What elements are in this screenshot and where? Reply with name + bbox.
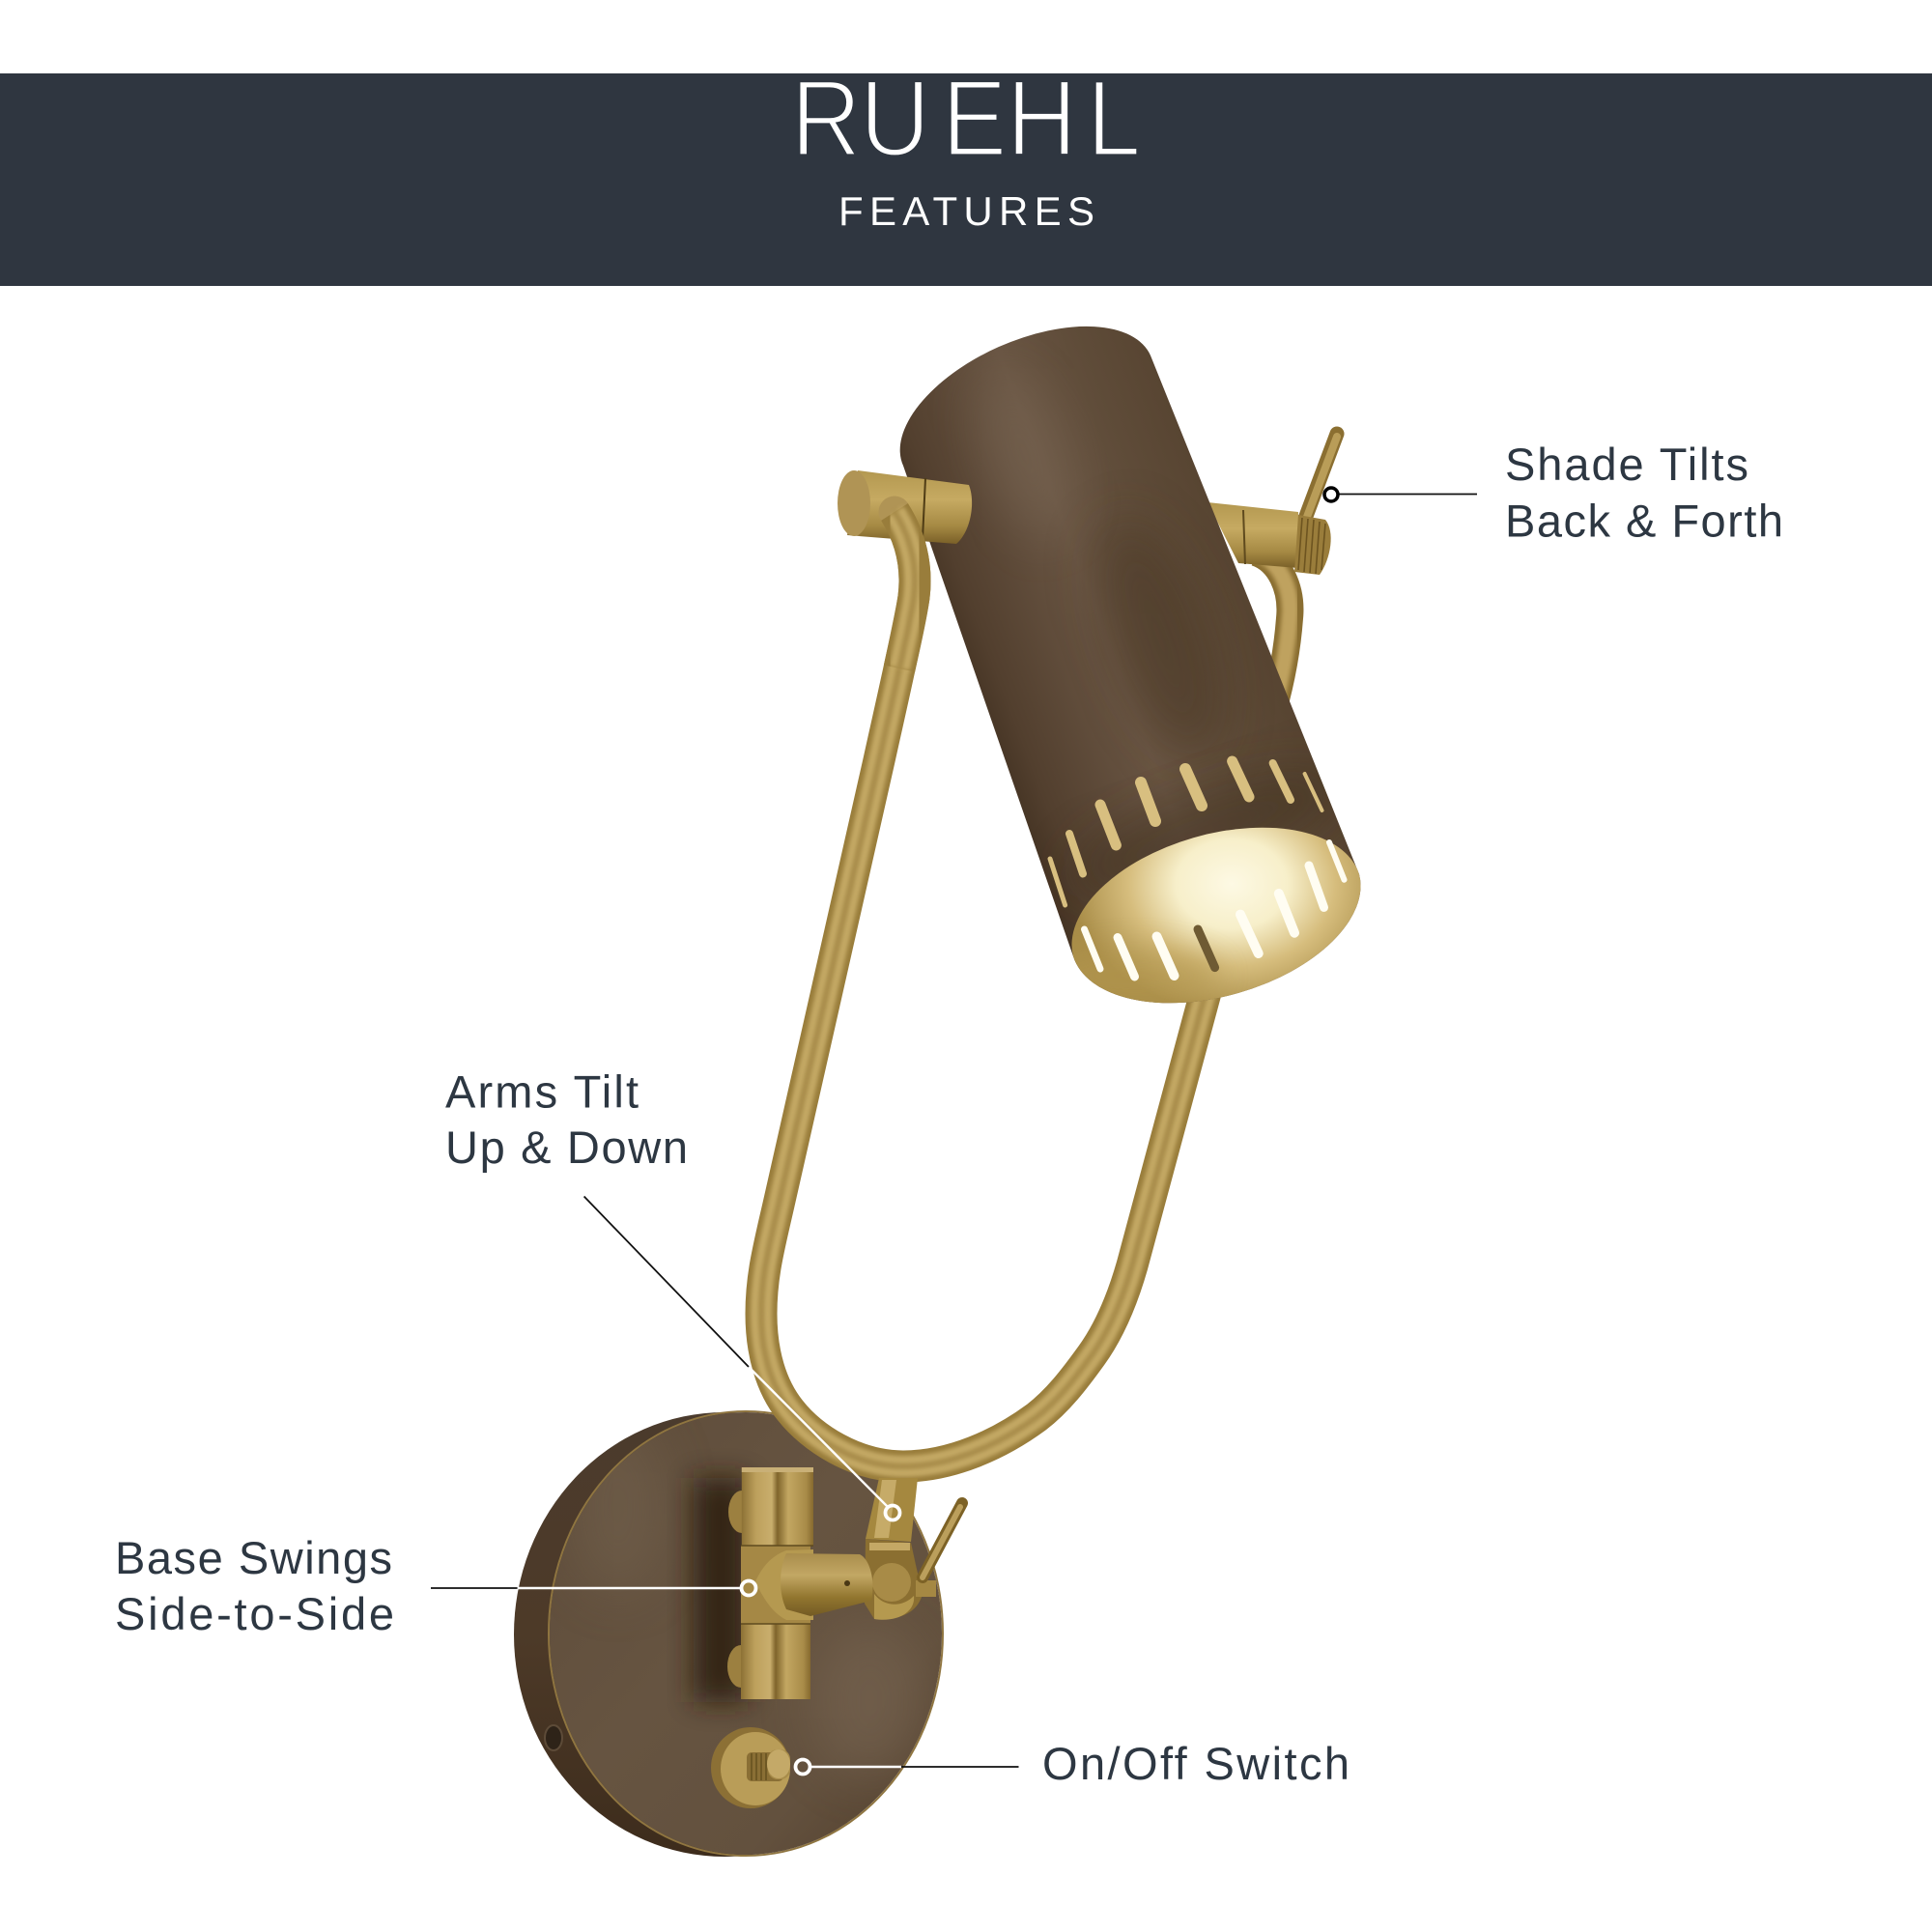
shade: [900, 327, 1361, 1005]
callout: arms tilt: [445, 1066, 900, 1520]
callout: shade tilts: Back & Forth: [1505, 495, 1783, 547]
callout: arms tilt: Arms Tilt: [445, 1066, 639, 1117]
wall plate: [514, 1411, 943, 1857]
callout: shade tilts: [1324, 439, 1783, 547]
right pivot and lever: [1208, 434, 1337, 710]
callout: on/off switch: On/Off Switch: [1042, 1738, 1350, 1789]
swivel base: [727, 1467, 813, 1699]
swing joint: [755, 1478, 962, 1620]
shade mouth: [1071, 828, 1361, 1003]
callout: shade tilts: Shade Tilts: [1505, 439, 1748, 490]
inner slots: [1084, 842, 1345, 977]
callout: arms tilt: Up & Down: [445, 1122, 688, 1173]
subtitle: FEATURES: FEATURES: [838, 188, 1094, 234]
wall sconce lamp illustration: [514, 327, 1361, 1857]
header banner: [0, 58, 1932, 286]
callout: base swings: Side-to-Side: [115, 1588, 394, 1639]
outer slots: [1050, 761, 1321, 905]
title: RUEHL: RUEHL: [791, 58, 1141, 179]
gold arm: [761, 512, 1208, 1466]
callout: base swings: Base Swings: [115, 1532, 392, 1583]
callout: on/off switch: [796, 1738, 1350, 1789]
callout: base swings: [115, 1532, 755, 1639]
on/off switch: [711, 1727, 790, 1808]
left pivot: [838, 470, 972, 668]
